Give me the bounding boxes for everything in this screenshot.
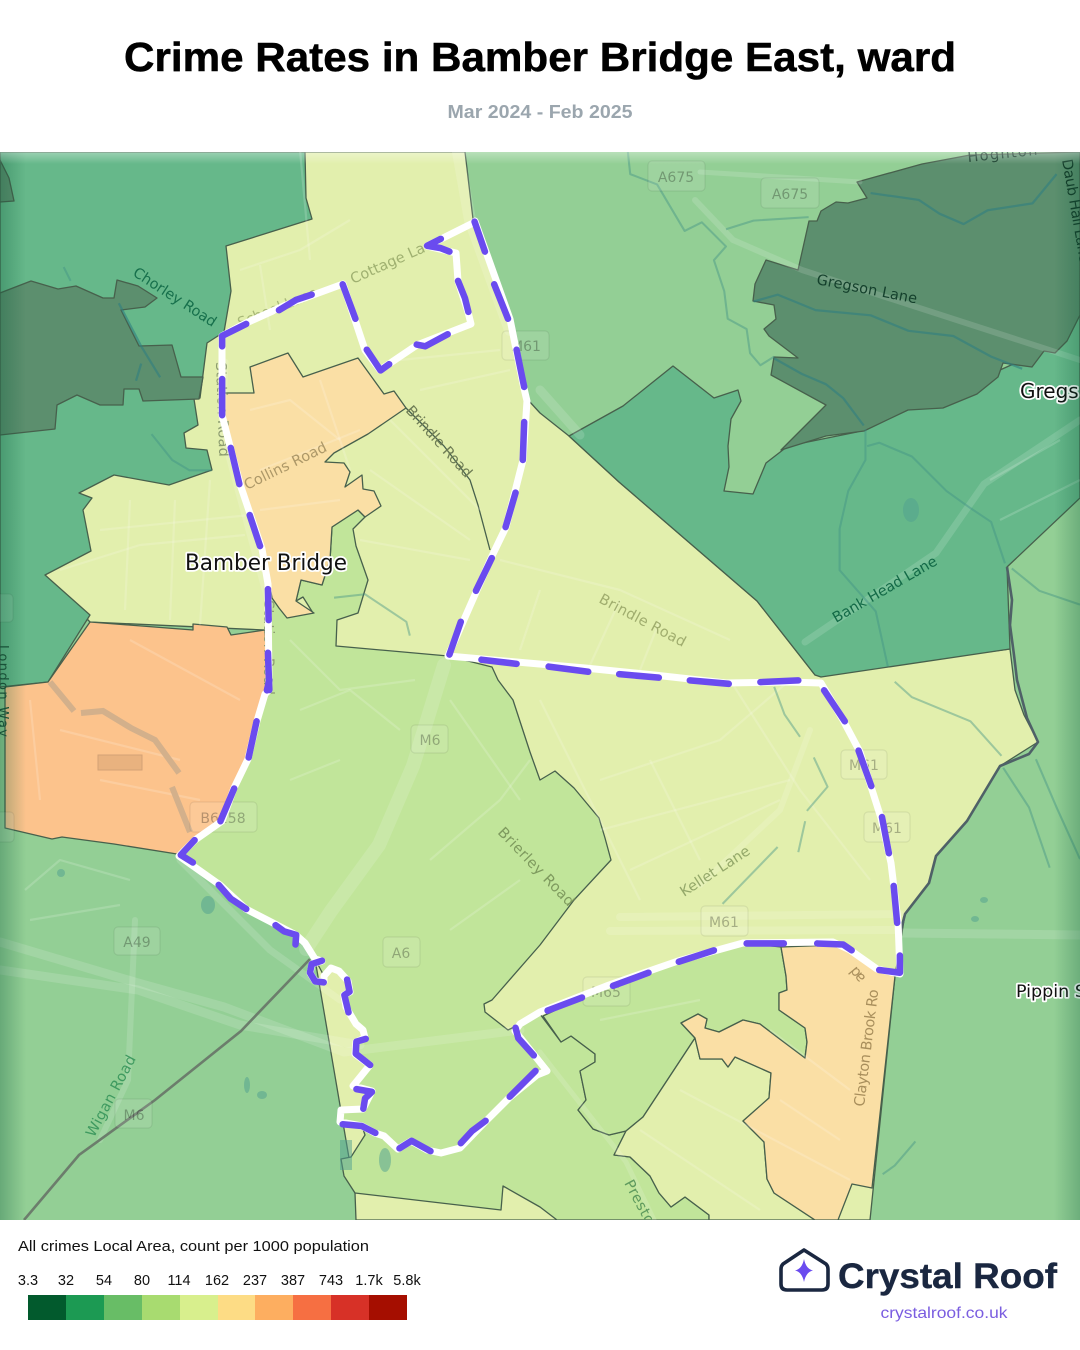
region: darkest north-east area	[753, 152, 1080, 450]
road labels: Brindle Road	[402, 403, 475, 481]
railway grey line	[24, 959, 310, 1220]
road labels: Hoghton	[967, 143, 1038, 166]
road labels: Cottage La	[348, 240, 428, 288]
subtitle: date range: Mar 2024 - Feb 2025	[448, 101, 632, 122]
road shields: M61	[872, 821, 902, 837]
region: south-west orange area	[5, 622, 269, 854]
legend values: 387	[281, 1273, 305, 1289]
boundary purple dashes, north-west part	[222, 222, 524, 690]
brown track in orange area	[50, 682, 190, 832]
rivers and streams, south-east	[723, 682, 1080, 1174]
legend values: 5.8k	[393, 1273, 421, 1289]
road labels: Brierley Road	[494, 825, 577, 910]
road shields: A675	[658, 170, 694, 186]
road labels: Kellet Lane	[677, 843, 753, 900]
rivers and streams, north-east	[628, 152, 1080, 667]
map edge fades	[0, 152, 1080, 1220]
road labels: Gregson Lane	[815, 272, 918, 307]
road labels: ad	[847, 963, 869, 986]
legend values: 54	[96, 1273, 112, 1289]
title: Crime Rates in Bamber Bridge East, ward	[124, 34, 956, 80]
region: east green area	[569, 315, 1080, 677]
region: south yellow patch	[614, 1038, 815, 1220]
road shields: B6258	[200, 811, 246, 827]
place label: Gregson Lane (clipped): Gregs	[1020, 379, 1079, 403]
region: west green area	[0, 152, 312, 687]
road shields: A49	[123, 935, 151, 951]
water patches	[57, 498, 988, 1172]
legend values: 237	[243, 1273, 267, 1289]
legend values: 1.7k	[355, 1273, 383, 1289]
rivers and streams, north-west	[64, 267, 410, 636]
road labels: Clayton Brook Ro	[852, 988, 882, 1107]
thick wiggly eastern boundary	[901, 567, 1038, 930]
road shields: M6	[420, 733, 441, 749]
legend values: 162	[205, 1273, 229, 1289]
road shields: M65	[591, 985, 621, 1001]
legend values	[18, 1273, 421, 1289]
region: Clayton Brook peach area	[681, 945, 895, 1220]
road shields: M61	[709, 915, 739, 931]
boundary purple dashes, south-east part	[548, 690, 900, 1011]
motorways and main roads	[0, 152, 1080, 1220]
legend title: All crimes Local Area, count per 1000 population	[18, 1238, 369, 1255]
road shields: A675	[772, 187, 808, 203]
region: central peach area	[222, 353, 406, 618]
region: darkest west area	[0, 280, 203, 435]
road labels: Presto	[620, 1177, 657, 1227]
road labels: Chorley Road	[130, 265, 219, 331]
road shields: A6	[392, 946, 410, 962]
place label: Bamber Bridge: Bamber Bridge	[185, 551, 347, 576]
minor street network	[25, 150, 1080, 1210]
brand name: Crystal Roof	[838, 1257, 1057, 1296]
legend values: 32	[58, 1273, 74, 1289]
brand url: crystalroof.co.uk	[880, 1305, 1009, 1322]
icon: house with star	[781, 1250, 828, 1290]
region: south-east lime area	[543, 943, 807, 1135]
boundary white casing	[179, 221, 900, 1153]
road labels: Wigan Road	[83, 1053, 140, 1140]
road labels: Station Road	[260, 600, 276, 695]
road shields: M6	[124, 1108, 145, 1124]
road shields: M61	[849, 758, 879, 774]
boundary purple dashes, north-east part	[549, 667, 798, 684]
legend values: 114	[167, 1273, 191, 1289]
road labels: Brindle Road	[596, 591, 688, 651]
road shields	[0, 161, 910, 1128]
legend values: 3.3	[18, 1273, 38, 1289]
region: central lime area	[179, 510, 709, 1220]
legend values: 80	[134, 1273, 150, 1289]
road labels: Collins Road	[242, 440, 330, 494]
legend	[18, 1238, 421, 1320]
thin boundary beside Brindle Road	[406, 408, 490, 550]
road labels: Station Road	[212, 362, 231, 457]
boundary purple dashes, south-west part	[181, 680, 536, 1151]
brand logo	[781, 1250, 1057, 1322]
region: large yellow-green area	[45, 152, 1038, 1220]
legend values: 743	[319, 1273, 343, 1289]
region: small dark sliver top left	[0, 160, 14, 202]
ward boundary	[179, 221, 900, 1153]
road shields: M61	[511, 339, 541, 355]
legend colour scale	[28, 1295, 407, 1320]
road labels: School Lane	[236, 285, 320, 332]
road labels: Bank Head Lane	[830, 554, 940, 626]
